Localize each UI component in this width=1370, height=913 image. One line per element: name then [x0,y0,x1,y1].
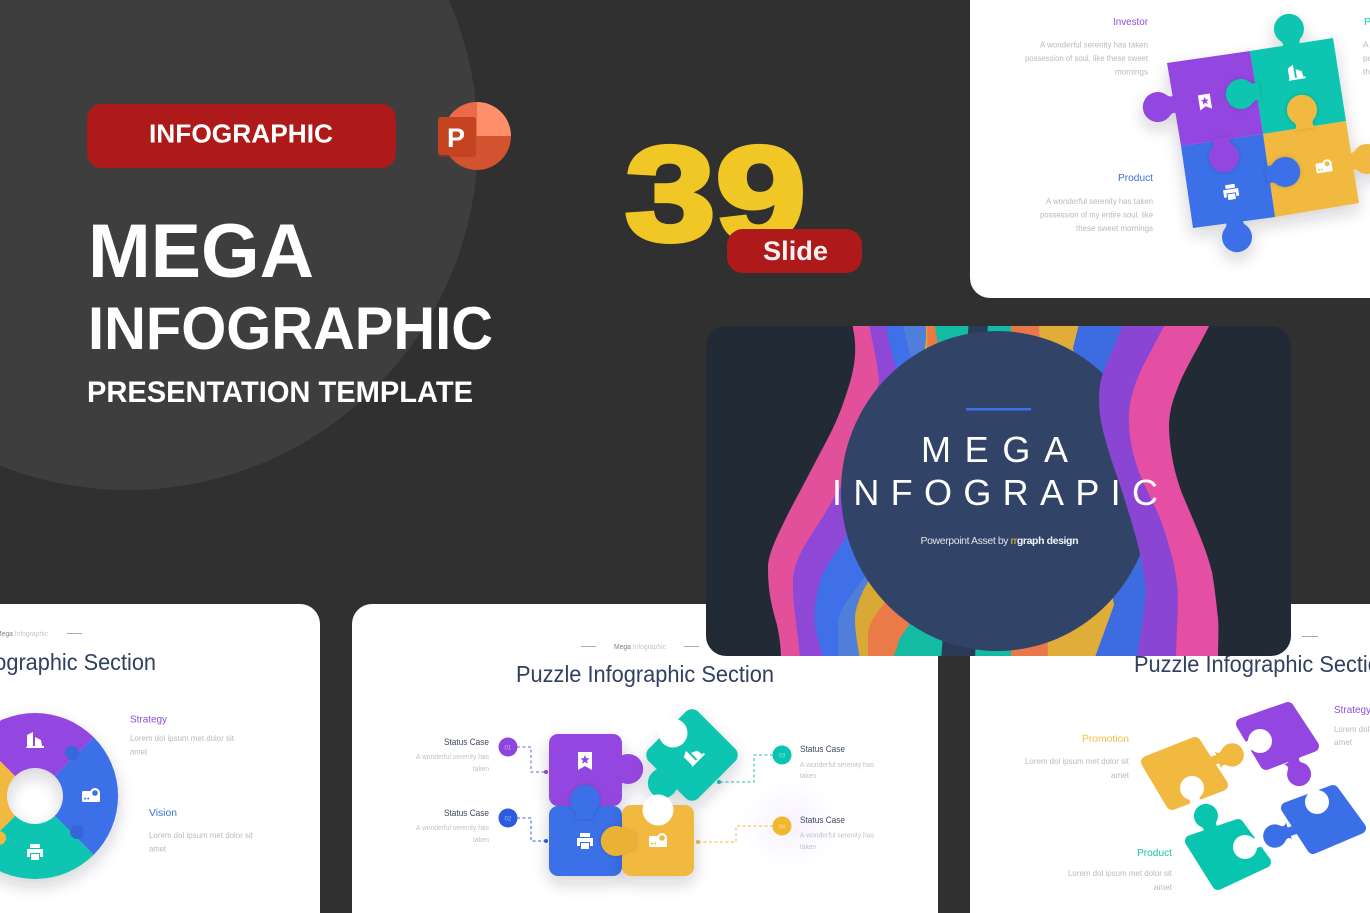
colourful waves [768,320,1218,660]
product text: these sweet mornings [1076,223,1153,233]
investor text: possession of soul, like these sweet [1025,53,1149,63]
square puzzle [1141,12,1370,254]
status case 2 text: Status Case [444,808,489,819]
panel: bottom right slide [970,604,1370,913]
main heading: INFOGRAPHIC [88,295,493,362]
icon: bookmark [1198,94,1212,110]
slide title: Puzzle Infographic Section [516,661,774,687]
connector 03 [717,755,773,784]
marker 02 [498,808,518,828]
product text [1040,172,1153,233]
separated puzzle pieces [1147,708,1360,884]
icon: projector [1315,159,1333,174]
promotion text [1025,733,1130,780]
infographic red badge [87,104,396,168]
investor text: A wonderful serenity has taken [1040,40,1148,50]
marker 03: 03 [778,754,786,760]
product text: Product [1118,172,1153,184]
product text: Product [1137,847,1172,859]
status case 4 text: A wonderful serenity has [800,832,874,840]
cover slide [706,320,1291,660]
investor text [1025,16,1149,76]
status case 3 text: Status Case [800,744,845,755]
product text: amet [1154,882,1173,892]
strategy text [1334,704,1370,747]
icon: buildings [681,743,705,767]
promotion text: amet [1111,770,1130,780]
status case 4 text [800,815,874,851]
status case 4 text: taken [800,844,816,851]
connector 01 [517,747,548,774]
icon: projector [649,833,667,847]
product text [1068,847,1173,892]
cover title: MEGA [921,429,1068,470]
strategy text [130,714,235,756]
vision text: Lorem dol ipsum met dolor sit [149,830,254,840]
connector 02 [517,818,548,843]
vision text: Vision [149,807,177,819]
investor text: mornings [1115,66,1148,76]
soft glow behind marker 04 [740,780,840,870]
clipped right column text: th [1363,66,1370,76]
status case 3 text: A wonderful serenity has [800,762,874,769]
vision text [149,807,254,854]
slide kicker: Mega Infographic [614,644,666,651]
panel: bottom middle slide [352,604,938,913]
clipped right column text: A [1363,40,1369,50]
yellow piece [1147,740,1247,805]
slide kicker [0,631,82,638]
icon: buildings [1286,63,1306,81]
kicker line [1302,636,1318,637]
status case 2 text [416,808,489,844]
marker 04: 04 [778,824,786,830]
panel: top right slide [970,0,1370,298]
central blob [841,331,1153,651]
icon: printer [577,833,593,849]
assembled puzzle [549,706,741,876]
icon: printer [1222,183,1240,201]
icon: bookmark [578,752,592,770]
strategy text: amet [130,746,148,756]
large background circle [0,0,478,490]
status case 1 text [416,737,489,773]
strategy text: Lorem dol ipsum met dolor sit [130,733,235,743]
slide count number: 39 [625,120,806,269]
marker 02: 02 [504,816,512,822]
promotion text: Promotion [1082,733,1129,745]
status case 3 text: taken [800,773,816,780]
connector 04 [696,826,773,844]
infographic red badge: INFOGRAPHIC [149,118,333,148]
strategy text: Strategy [130,714,168,726]
marker 01 [498,738,518,756]
main heading: MEGA [88,209,314,294]
icon: printer [27,844,43,860]
main heading: PRESENTATION TEMPLATE [87,376,473,409]
status case 4 text: Status Case [800,815,845,826]
clipped right column text [1363,16,1370,76]
status case 1 text: taken [473,766,489,773]
cover title: INFOGRAPIC [832,472,1158,513]
marker 04 [772,816,792,836]
cover subtitle: Powerpoint Asset by rrgraph design [920,535,1078,547]
donut puzzle chart [0,713,118,879]
icon: buildings [26,732,44,748]
interlocking puzzle tabs [1206,76,1320,190]
promotion text: Lorem dol ipsum met dolor sit [1025,756,1130,766]
purple piece [1242,708,1315,790]
accent line [966,408,1031,410]
product text: Lorem dol ipsum met dolor sit [1068,868,1173,878]
slide badge [727,229,862,273]
strategy text: amet [1334,737,1353,747]
product text: A wonderful serenity has taken [1046,196,1153,206]
blue piece [1260,788,1360,851]
slide kicker [581,644,699,651]
status case 2 text: A wonderful serenity has [416,825,489,832]
status case 2 text: taken [473,837,489,844]
icon: powerpoint logo: P [447,123,465,153]
marker 03 [772,746,792,764]
status case 1 text: Status Case [444,737,489,748]
panel: bottom left slide [0,604,320,913]
product text: possession of my entire soul, like [1040,210,1153,220]
icon: powerpoint logo [438,102,511,170]
marker 01: 01 [504,746,512,752]
investor text: Investor [1113,16,1148,28]
status case 1 text: A wonderful serenity has [416,754,489,761]
teal piece [1191,800,1265,884]
cover title [832,429,1158,513]
status case 3 text [800,744,874,780]
vision text: amet [149,844,167,854]
slide badge: Slide [763,236,828,266]
main heading [87,209,493,409]
icon: projector [82,788,100,802]
